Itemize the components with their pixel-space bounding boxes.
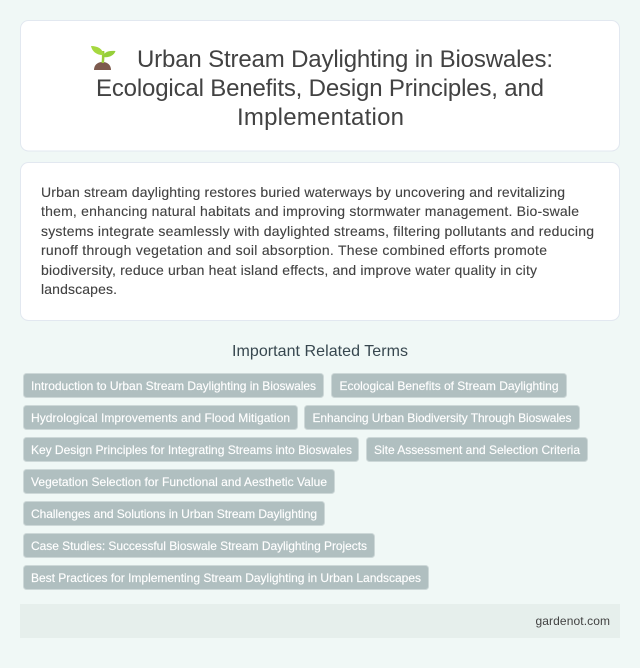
tag: Key Design Principles for Integrating Streams into Bioswales — [31, 443, 352, 457]
panel: related term tags — [24, 374, 588, 590]
tag — [24, 470, 334, 494]
title: Implementation — [237, 104, 404, 131]
tag: Introduction to Urban Stream Daylighting in Bioswales — [31, 379, 316, 393]
tag — [24, 566, 428, 590]
summary paragraph: systems integrate seamlessly with daylighted streams, filtering pollutants and reducing — [41, 223, 594, 239]
tag — [304, 406, 580, 430]
summary paragraph: landscapes. — [41, 281, 117, 297]
tag — [24, 406, 298, 430]
footer: gardenot.com — [536, 614, 610, 628]
tag: Enhancing Urban Biodiversity Through Bioswales — [312, 411, 572, 425]
icon: seedling — [91, 46, 116, 70]
footer — [20, 604, 620, 638]
tag — [366, 438, 588, 462]
title: Ecological Benefits, Design Principles, and — [96, 75, 544, 102]
tag: Hydrological Improvements and Flood Mitigation — [31, 411, 290, 425]
title: Urban Stream Daylighting in Bioswales: — [137, 46, 553, 73]
heading: important related terms: Important Related Terms — [232, 343, 408, 360]
summary paragraph: Urban stream daylighting restores buried waterways by uncovering and revitalizing — [41, 184, 565, 200]
tag: Case Studies: Successful Bioswale Stream Daylighting Projects — [31, 539, 367, 553]
panel: title card — [20, 20, 620, 151]
panel: summary — [20, 162, 620, 320]
summary paragraph: them, enhancing natural habitats and improving stormwater management. Bio-swale — [41, 203, 579, 219]
tag: Challenges and Solutions in Urban Stream Daylighting — [31, 507, 317, 521]
tag — [24, 534, 374, 558]
tag: Vegetation Selection for Functional and Aesthetic Value — [31, 475, 327, 489]
tag: Best Practices for Implementing Stream Daylighting in Urban Landscapes — [31, 571, 421, 585]
title — [96, 46, 553, 131]
tag: Ecological Benefits of Stream Daylighting — [340, 379, 558, 393]
tag — [332, 374, 566, 398]
tag — [24, 438, 358, 462]
tag — [24, 502, 324, 526]
summary paragraph: runoff through vegetation and soil absorption. These combined efforts promote — [41, 242, 547, 258]
tag — [24, 374, 324, 398]
tag: Site Assessment and Selection Criteria — [374, 443, 580, 457]
summary paragraph: biodiversity, reduce urban heat island effects, and improve water quality in city — [41, 262, 537, 278]
summary paragraph — [41, 184, 594, 297]
